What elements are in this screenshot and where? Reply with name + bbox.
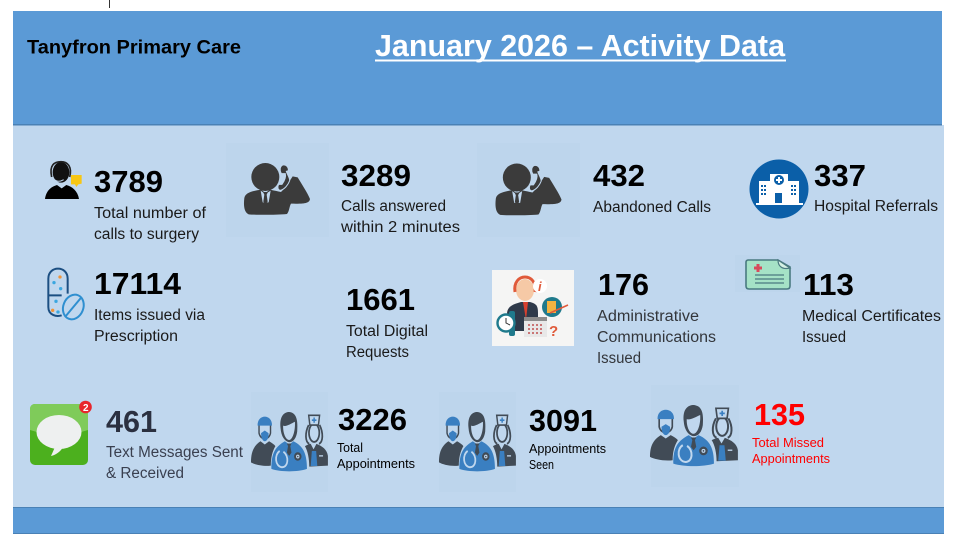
metric: missed appointments <box>650 385 830 487</box>
panel: footer band <box>13 507 944 534</box>
label: Text Messages Sent <box>106 444 244 461</box>
label <box>802 308 941 346</box>
icon: person on phone <box>226 143 329 237</box>
label: Appointments <box>752 451 830 466</box>
label: Total Digital <box>346 323 428 340</box>
label: Appointments <box>529 441 606 456</box>
icon: admin agent: i <box>538 279 542 294</box>
practice name: Tanyfron Primary Care <box>27 38 241 58</box>
value: 3091 <box>529 403 597 438</box>
value: 461 <box>106 404 157 439</box>
label: Administrative <box>597 308 699 325</box>
value: 432 <box>593 158 645 193</box>
label: Prescription <box>94 328 178 345</box>
label: Items issued via <box>94 307 205 324</box>
label <box>340 198 460 236</box>
metric: prescription items <box>48 266 205 345</box>
value: 17114 <box>94 266 182 301</box>
icon: clinical staff <box>251 392 328 492</box>
metric: hospital referrals <box>750 158 938 218</box>
metric: appointments seen <box>439 392 606 492</box>
label: Total <box>337 440 363 455</box>
label: Hospital Referrals <box>814 198 938 215</box>
value: 3226 <box>338 402 407 437</box>
metric: digital requests <box>346 282 428 361</box>
label: Appointments <box>337 456 415 471</box>
label: Requests <box>346 344 409 361</box>
label: Calls answered <box>341 198 446 215</box>
value: 176 <box>598 267 649 302</box>
label: calls to surgery <box>94 226 199 243</box>
metric: medical certificates <box>735 255 941 346</box>
label: Abandoned Calls <box>593 199 711 216</box>
label: within 2 minutes <box>340 219 460 236</box>
label: Seen <box>529 457 554 472</box>
label <box>346 323 428 361</box>
panel: main light background <box>13 125 944 507</box>
label <box>597 308 716 367</box>
icon: hospital <box>750 160 808 218</box>
label <box>94 307 205 345</box>
icon: admin agent: ? <box>549 323 558 340</box>
label: Medical Certificates <box>802 308 941 325</box>
icon: pills <box>48 269 87 322</box>
value: 1661 <box>346 282 415 317</box>
label: Issued <box>597 350 641 367</box>
label <box>337 440 415 471</box>
value: 3789 <box>94 164 163 199</box>
label: Communications <box>597 329 716 346</box>
icon: message app <box>30 401 92 465</box>
metric: total appointments <box>251 392 415 492</box>
cursor tick mark <box>109 0 110 8</box>
label <box>94 205 207 243</box>
icon: admin agent <box>492 270 574 346</box>
metric: calls answered <box>226 143 460 237</box>
label <box>752 435 830 466</box>
label: Total Missed <box>752 435 824 450</box>
icon: person on phone <box>477 143 580 237</box>
value: 3289 <box>341 158 411 193</box>
metric: total calls <box>45 162 207 243</box>
metric: administrative communications <box>492 267 716 367</box>
label: Issued <box>802 329 846 346</box>
label <box>529 441 606 472</box>
metric: abandoned calls <box>477 143 711 237</box>
title: January 2026 – Activity Data <box>375 28 786 63</box>
label: & Received <box>106 465 184 482</box>
value: 337 <box>814 158 866 193</box>
icon: message app: 2 <box>83 403 89 414</box>
icon: clinical staff <box>650 385 739 487</box>
metric: text messages <box>30 401 244 482</box>
icon: headset agent <box>45 162 82 199</box>
value: 113 <box>803 267 854 302</box>
icon: clinical staff <box>439 392 516 492</box>
label <box>106 444 244 482</box>
label: Total number of <box>94 205 207 222</box>
icon: certificate <box>735 255 800 292</box>
panel: header band <box>13 11 942 126</box>
value: 135 <box>754 397 805 432</box>
